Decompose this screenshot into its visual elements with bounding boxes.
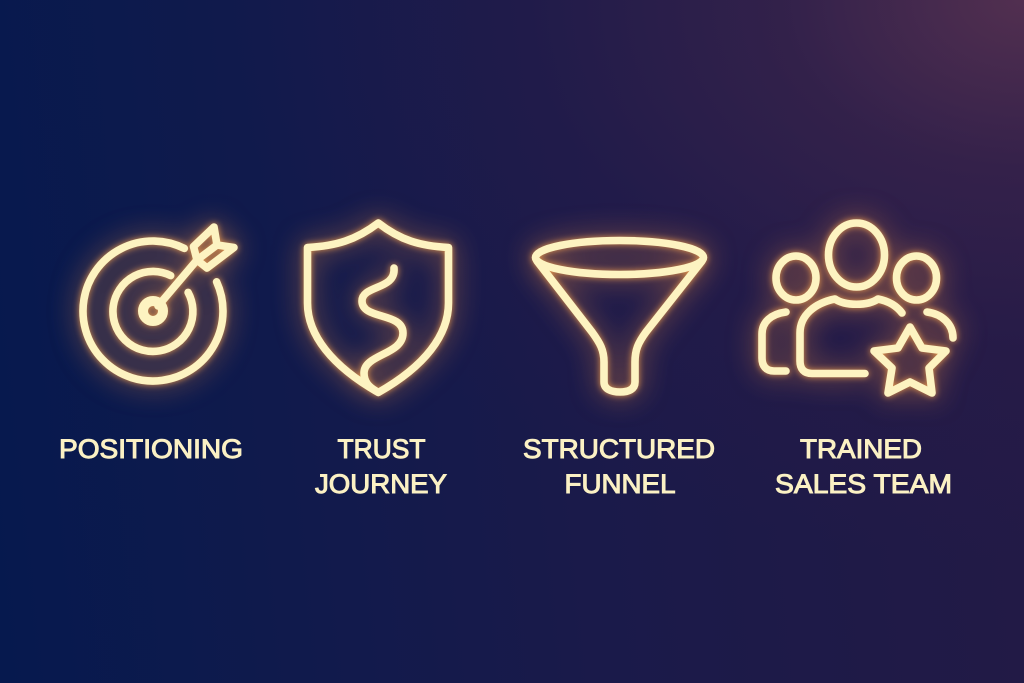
label: trained sales team: TRAINED [800,434,922,464]
label: structured funnel: STRUCTURED [523,434,715,464]
icon: target with arrow [83,227,234,381]
label: structured funnel [523,434,715,499]
label: trained sales team: SALES TEAM [775,469,952,499]
label: positioning: POSITIONING [59,434,243,464]
label: trained sales team [775,434,952,499]
label: trust journey [315,434,447,499]
label: trust journey: TRUST [338,434,426,464]
label: structured funnel: FUNNEL [564,469,676,499]
icon: shield with winding path [308,223,448,392]
label: trust journey: JOURNEY [315,469,447,499]
icon: funnel [536,240,704,392]
icon: team with star [762,223,953,393]
